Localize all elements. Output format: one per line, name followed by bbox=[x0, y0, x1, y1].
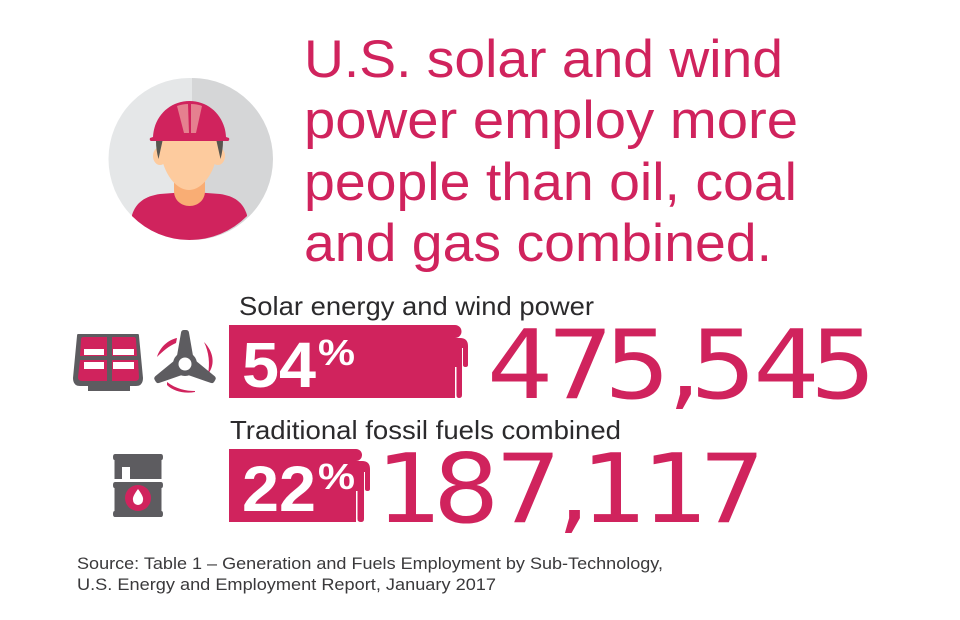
icon: oil barrel bbox=[113, 454, 163, 517]
text: 54 percent bbox=[242, 329, 355, 401]
text: 22 percent bbox=[242, 453, 355, 525]
source note: U.S. Energy and Employment Report, January 2017 bbox=[77, 575, 496, 594]
title: U.S. solar and wind bbox=[304, 30, 783, 89]
icon: solar panel bbox=[73, 334, 143, 391]
title bbox=[304, 30, 798, 273]
bar: fossil fuels share person bbox=[229, 449, 370, 522]
text: 22 percent: 22 bbox=[242, 453, 316, 525]
icon: construction worker avatar bbox=[108, 78, 273, 245]
text: 54 percent: % bbox=[318, 332, 355, 373]
title: people than oil, coal bbox=[304, 153, 797, 212]
text: 54 percent: 54 bbox=[242, 329, 316, 401]
number: 475,545: 475,545 bbox=[487, 310, 876, 421]
bar: solar and wind share person bbox=[229, 325, 468, 398]
text: 22 percent: % bbox=[318, 456, 355, 497]
source note bbox=[77, 554, 663, 594]
label: fossil fuels heading: Traditional fossil fuels combined bbox=[230, 415, 621, 445]
title: power employ more bbox=[304, 91, 798, 150]
title: and gas combined. bbox=[304, 214, 772, 273]
source note: Source: Table 1 – Generation and Fuels Employment by Sub-Technology, bbox=[77, 554, 663, 573]
label: solar and wind heading: Solar energy and wind power bbox=[239, 291, 594, 321]
icon: wind turbine bbox=[157, 333, 213, 393]
number: 187,117: 187,117 bbox=[376, 434, 765, 545]
